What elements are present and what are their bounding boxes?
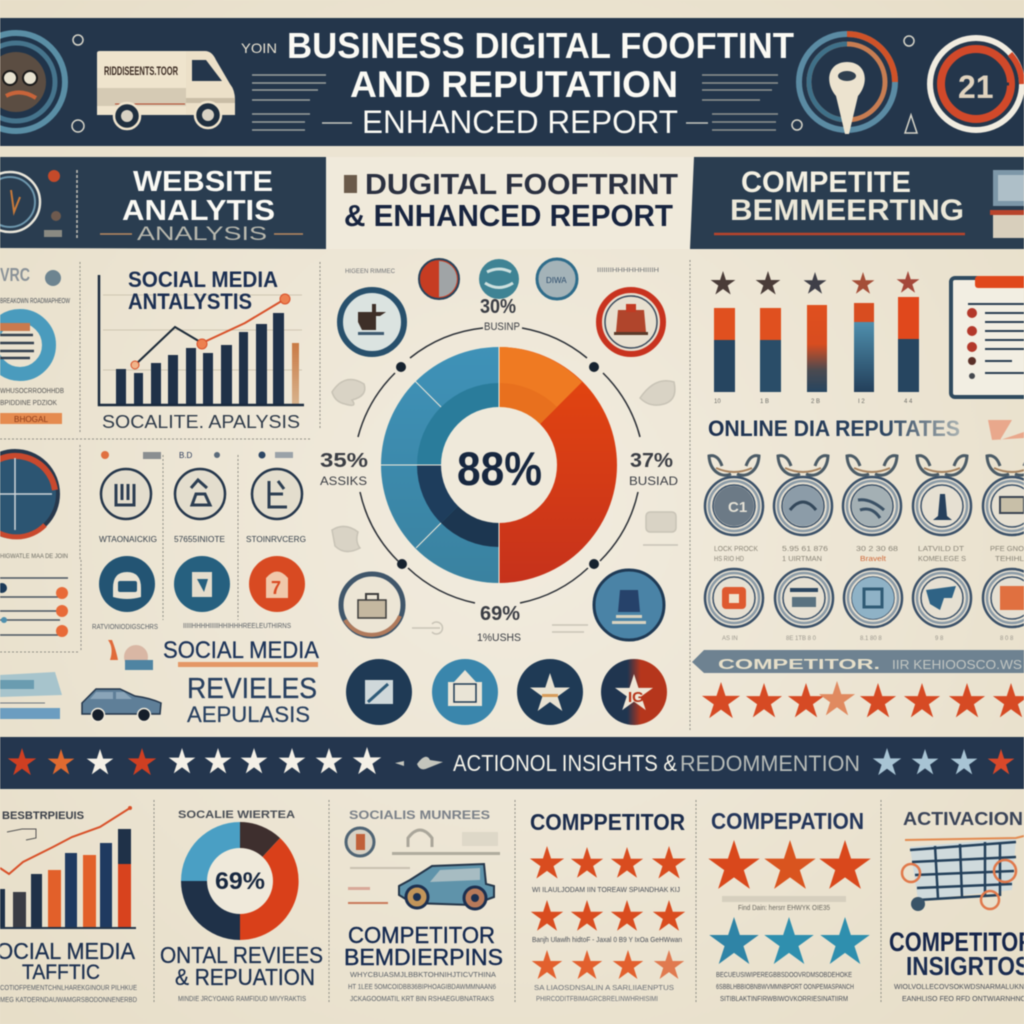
icons: faded sketches xyxy=(332,380,678,634)
stat: top: BUSINP xyxy=(484,321,520,333)
icon: dial xyxy=(0,172,40,232)
body xyxy=(894,984,1024,1003)
heading: analytis: ANALYTIS xyxy=(122,195,275,227)
rating: right stars xyxy=(873,748,1014,775)
text block: right faded lines xyxy=(686,75,778,130)
stat: left: ASSIKS xyxy=(320,474,367,488)
panel: competition big stars xyxy=(708,808,871,1003)
icon: small glyphs in header xyxy=(72,35,917,133)
body xyxy=(348,972,496,1003)
heading: COMPPETITOR xyxy=(530,809,685,835)
outer arc ring xyxy=(358,328,640,603)
stat: centre percentage: 88% xyxy=(457,442,542,495)
body: MEG KATOERNDAUWAMGRSBODONNENERBD xyxy=(0,997,137,1004)
heading: ONTAL REVIEES xyxy=(160,942,323,968)
stat: right: 37% xyxy=(630,450,673,472)
labels: medal row captions: 30 2 30 68 xyxy=(856,546,898,553)
subheading: analysis: ANALYSIS xyxy=(137,224,267,245)
icons: outlined social badges xyxy=(101,469,302,519)
icon: mini chart badge xyxy=(108,640,153,670)
labels: medal row captions xyxy=(714,546,1024,563)
rating: orange stars xyxy=(708,840,871,889)
body: PHIRCODITFBIMAGRCBRELINWHRHISIMI xyxy=(536,996,658,1003)
panel: competitor benchmarking card xyxy=(344,808,503,1003)
icon: left globe xyxy=(0,451,58,537)
banner: competitor ribbon xyxy=(692,650,1024,673)
panel: left sidebar donut: BPIDDINE PDZIOK xyxy=(0,398,57,407)
rating: red stars row xyxy=(702,681,1024,718)
rating: teal stars xyxy=(709,917,870,964)
heading: enhanced report: & ENHANCED REPORT xyxy=(344,198,673,233)
icon: delivery van: RIDDISEENTS.TOOR xyxy=(104,64,178,78)
labels: medal row captions: KOMELEGE S xyxy=(918,556,966,563)
stat: top xyxy=(480,296,520,333)
icon: building xyxy=(990,170,1024,238)
heading: COMPETITOR xyxy=(348,922,495,948)
heading: ACTIVACION xyxy=(903,809,1023,829)
title line 2: AND REPUTATION xyxy=(350,64,678,105)
body: SA LIAOSDNSALIN A SARLIIAENPTUS xyxy=(534,985,674,992)
icons: medals second row xyxy=(705,569,1024,627)
labels: medal row captions: LATVILD DT xyxy=(918,546,965,553)
text: filled badges caption xyxy=(92,623,291,631)
panel: online reviews donut xyxy=(160,809,323,1003)
labels: medal row captions: 5.95 61 876 xyxy=(782,546,828,553)
body: JCKAGOOMATIL KRT BIN RSHAEGUBNATRAKS xyxy=(350,996,494,1003)
labels: medal row captions: Bravelt xyxy=(860,556,886,563)
labels: badge names: STOINRVCERG xyxy=(246,535,306,544)
text: globe caption: HIGWATLE MAA DE JOIN xyxy=(0,554,68,560)
icon: bird smudge xyxy=(395,757,443,769)
heading: recommendation: REDOMMENTION xyxy=(680,751,860,776)
text: Find Dain: hersrr EHWYK OIE35 xyxy=(738,905,830,912)
icons: faded tools xyxy=(346,828,500,904)
heading tag: YOIN xyxy=(241,40,277,56)
panel: left sidebar donut: BHOGAL xyxy=(14,415,49,424)
heading: actional insights: ACTIONOL INSIGHTS & xyxy=(453,750,677,776)
body xyxy=(532,887,682,1003)
body: SITIBLAKTINFIRWBIWOVKORRIESINATIIRM xyxy=(720,996,848,1003)
label: BESBTRPIEUIS xyxy=(2,810,84,822)
labels: medal row captions: 1 UIRTMAN xyxy=(782,556,822,563)
icons: top small circles: DIWA xyxy=(546,276,567,285)
small bar labels: 4 4 xyxy=(904,399,913,405)
labels: badge names: 57655INIOTE xyxy=(174,535,225,544)
small bar labels: 10 xyxy=(714,399,721,405)
top header band xyxy=(0,18,1024,146)
heading: competite: COMPETITE xyxy=(741,166,911,199)
stat: bottom: 1%USHS xyxy=(477,632,521,644)
icon: car xyxy=(399,864,494,909)
panel: left sidebar donut: VRC xyxy=(0,265,30,285)
heading: reputation: AEPULASIS xyxy=(187,702,310,727)
heading: online reputation: ONLINE DIA REPUTATES xyxy=(708,416,960,441)
stat: top: 30% xyxy=(480,296,516,318)
banner: competitor ribbon: IIR KEHIOOSCO.WS xyxy=(892,657,1022,672)
panel: competitor star ratings xyxy=(530,809,686,1003)
icon: bottom right podium badge xyxy=(594,570,664,640)
icons: filled social badges xyxy=(99,556,305,612)
body: HT 1LEE 5OMCOIDBB36BIPHOAGIBDAWMMNAAN6 xyxy=(348,984,496,991)
icons: top small circles xyxy=(419,259,577,299)
icon: numbered ring: 21 xyxy=(958,69,994,105)
label: SOCIALIS MUNREES xyxy=(349,808,490,822)
icon: left truck panel xyxy=(0,672,62,719)
icon: numbered ring xyxy=(930,38,1022,130)
label: SOCALIE WIERTEA xyxy=(178,809,295,821)
body: BECUEUSIWIPEREGBBSDOOVRDMSOBDEHOKE xyxy=(716,972,852,979)
icons: laurel medals row: C1 xyxy=(728,499,747,516)
band: actional insights xyxy=(0,737,1024,789)
heading: BEMDIERPINS xyxy=(344,944,503,970)
chart: traffic bars xyxy=(0,806,136,928)
icon: delivery van xyxy=(97,51,235,129)
icons: filled social badges: 7 xyxy=(271,578,281,598)
text block: left faded lines xyxy=(252,75,352,130)
labels: medals second row captions: AS IN xyxy=(722,636,738,642)
icon: car xyxy=(82,689,161,722)
rating: star grid xyxy=(530,846,686,979)
icon: left target dial with face xyxy=(0,33,65,131)
labels: top markers xyxy=(101,451,293,460)
title line 3: ENHANCED REPORT xyxy=(362,104,678,140)
labels: medals second row captions: 8 0 8 xyxy=(1000,636,1014,642)
small bar labels: I 2 xyxy=(858,399,865,405)
heading: bemmeerting: BEMMEERTING xyxy=(730,194,964,227)
icon: orange smudge xyxy=(988,420,1024,440)
labels: medal row captions: TEHIHL xyxy=(995,556,1024,563)
list: ranking rows xyxy=(0,578,68,637)
small bar labels: 1 B xyxy=(760,399,769,405)
heading: analytics: ANTALYSTIS xyxy=(128,289,252,314)
stat: right xyxy=(629,450,678,488)
heading: social media: SOCIAL MEDIA xyxy=(128,267,278,292)
panel: social media traffic xyxy=(0,806,137,1004)
heading: & REPUATION xyxy=(175,964,315,990)
icon: bottom left briefcase badge xyxy=(341,574,403,636)
icon: small markers xyxy=(44,170,62,237)
chart: social media bars xyxy=(99,275,304,405)
icon: top left monument badge xyxy=(340,290,404,354)
chart: central donut xyxy=(358,328,640,603)
panel: competitor benchmarking xyxy=(690,157,1024,249)
icon: shopping cart xyxy=(902,836,1024,911)
body: Banjh Ulawlh hidtoF - Jaxal 0 B9 Y IxOa GeHWwan xyxy=(532,937,682,944)
labels: medals second row captions xyxy=(722,636,1014,642)
heading: digital footprint: DUGITAL FOOFTRINT xyxy=(365,169,678,201)
texts: top small labels xyxy=(345,268,659,275)
rating: left stars xyxy=(8,747,381,775)
panel: left sidebar donut: WHUSOCRROOHHDB xyxy=(0,388,64,395)
icons: bottom circle row xyxy=(346,659,667,725)
text: filled badges caption: IIIIIHHHHIIIIIHHIHHHREELEUTHIRNS xyxy=(183,623,291,630)
heading: TAFFTIC xyxy=(22,961,100,984)
text xyxy=(722,896,846,912)
heading: social media: SOCIAL MEDIA xyxy=(163,637,319,664)
texts: top small labels: HIGEEN RIMMEC xyxy=(345,269,396,275)
labels: medal row captions: PFE GNO xyxy=(990,546,1024,553)
icons: bottom circle row: IG xyxy=(628,689,644,706)
stat: left: 35% xyxy=(320,450,368,472)
stat: right: BUSIAD xyxy=(629,474,678,488)
icon: top right bell badge xyxy=(599,290,663,354)
stat: bottom xyxy=(477,603,521,644)
panel: left sidebar donut: BREAKOWN ROADMAPHEOW xyxy=(0,298,70,305)
labels: medal row captions: HS RIO HD xyxy=(714,556,744,563)
text: filled badges caption: RATVIONIODIGSCHRS xyxy=(92,624,158,631)
heading: COMPEPATION xyxy=(711,808,864,834)
texts: top small labels: IIIIIIIHHHHHHIIIIH xyxy=(597,268,659,274)
caption: social analysis: SOCALITE. APALYSIS xyxy=(102,412,300,432)
banner: competitor ribbon: COMPETITOR. xyxy=(718,656,880,673)
stat: bottom: 69% xyxy=(480,603,520,625)
body: 6SBBLHBBIOBNBWVMMNBPORT OONPEMASPANCH xyxy=(716,984,854,991)
labels: medals second row captions: 8E 1TB 8 0 xyxy=(786,636,817,642)
body: WHYCBUASMJLBBKTOHNIHJTICVTHINA xyxy=(350,972,496,979)
body: MINDIE JRCYOANG RAMFIDUD MIVYRAKTIS xyxy=(178,996,306,1003)
icons: laurel medals row xyxy=(705,456,1024,535)
panel: left sidebar donut xyxy=(0,265,70,424)
labels: badge names: WTAONAICKIG xyxy=(99,535,157,544)
body: COTIOFPEMENTCHNLHAREKGINOUR PILHKUE xyxy=(0,985,137,992)
panel: competitor insights xyxy=(889,809,1024,1003)
labels: medals second row captions: 9 8 xyxy=(935,636,944,642)
heading: reviews: REVIELES xyxy=(187,673,317,705)
small bar labels: 2 B xyxy=(811,399,820,405)
icon: map pin ring xyxy=(799,34,895,134)
stat: left xyxy=(320,450,368,488)
labels: medal row captions: LOCK PROCK xyxy=(714,546,758,553)
labels: top markers: B.D xyxy=(179,451,193,460)
heading: website: WEBSITE xyxy=(133,166,273,198)
chart: mini donut xyxy=(181,822,299,940)
stat: 69% xyxy=(215,868,265,895)
body xyxy=(0,985,137,1004)
body: EANHLISO FEO RFD ONTWIARNHNO xyxy=(902,996,1024,1003)
labels: badge names xyxy=(99,535,306,544)
panel: digital footprint title xyxy=(326,157,694,249)
labels: medals second row captions: 8.1 80 8 xyxy=(860,636,882,642)
chart: star-topped stacked bars xyxy=(711,271,919,392)
panel: website analytics xyxy=(0,157,330,249)
body xyxy=(716,972,854,1003)
icon: clipboard xyxy=(951,276,1024,397)
body: WI ILAULJODAM IIN TOREAW SPIANDHAK KIJ xyxy=(532,887,680,894)
body: WIOLVOLLECOVSOKWDSNARMALUKNI xyxy=(894,984,1024,991)
title line 1: BUSINESS DIGITAL FOOFTINT xyxy=(287,25,794,66)
small bar labels xyxy=(714,399,913,405)
